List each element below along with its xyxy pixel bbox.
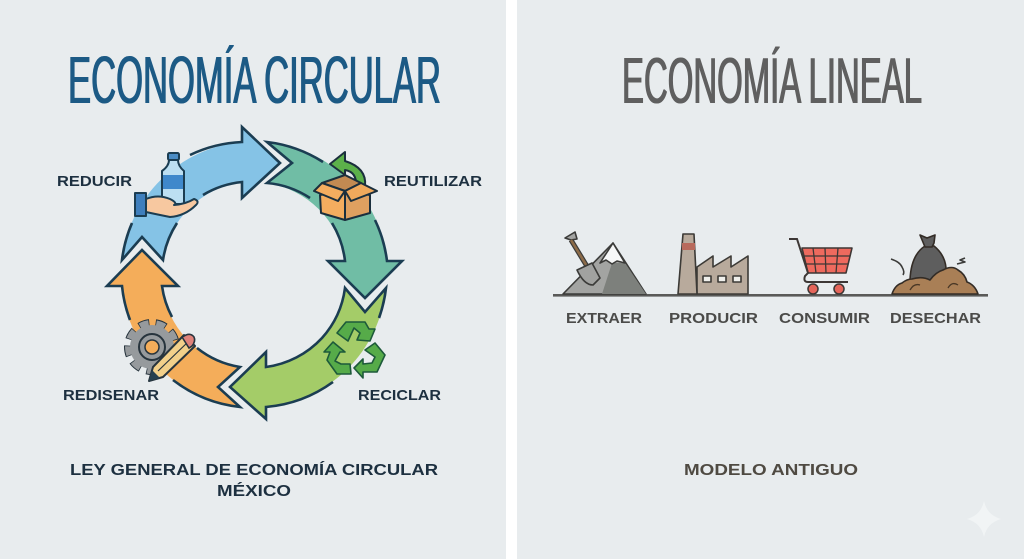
icon: trash bag and waste pile bbox=[891, 235, 978, 294]
icon: mountain and shovel bbox=[563, 232, 646, 294]
label: consumir: CONSUMIR bbox=[779, 310, 870, 327]
label: rediseñar: REDISENAR bbox=[63, 387, 159, 404]
arrow: green reciclar bbox=[230, 288, 386, 419]
caption: ley general: MÉXICO bbox=[217, 481, 291, 500]
title: economía circular: ECONOMÍA CIRCULAR bbox=[68, 43, 441, 118]
icon: factory bbox=[678, 234, 748, 294]
icon: bottle and hand bbox=[135, 153, 198, 217]
arrow: teal reutilizar bbox=[267, 142, 402, 298]
arrow: orange rediseñar bbox=[107, 250, 240, 407]
caption: modelo antiguo: MODELO ANTIGUO bbox=[684, 462, 858, 479]
arrow: blue reducir bbox=[122, 127, 280, 260]
label: reciclar: RECICLAR bbox=[358, 387, 441, 404]
panel: economía lineal bbox=[517, 0, 1024, 559]
label: reducir: REDUCIR bbox=[57, 173, 132, 190]
icon: gear and pencil bbox=[128, 323, 195, 381]
timeline baseline bbox=[553, 294, 988, 297]
cycle diagram bbox=[107, 127, 402, 419]
icon: shopping cart bbox=[789, 239, 852, 294]
label: producir: PRODUCIR bbox=[669, 310, 758, 327]
icon: cardboard box with arrow bbox=[314, 152, 377, 220]
caption: ley general: LEY GENERAL DE ECONOMÍA CIRCULAR bbox=[70, 460, 439, 479]
label: desechar: DESECHAR bbox=[890, 310, 981, 327]
label: extraer: EXTRAER bbox=[566, 310, 642, 327]
caption: ley general bbox=[70, 460, 439, 500]
icon: sparkle bbox=[967, 501, 1001, 537]
panel: economía circular bbox=[0, 0, 506, 559]
icon: recycling arrows bbox=[324, 322, 385, 378]
label: reutilizar: REUTILIZAR bbox=[384, 173, 482, 190]
